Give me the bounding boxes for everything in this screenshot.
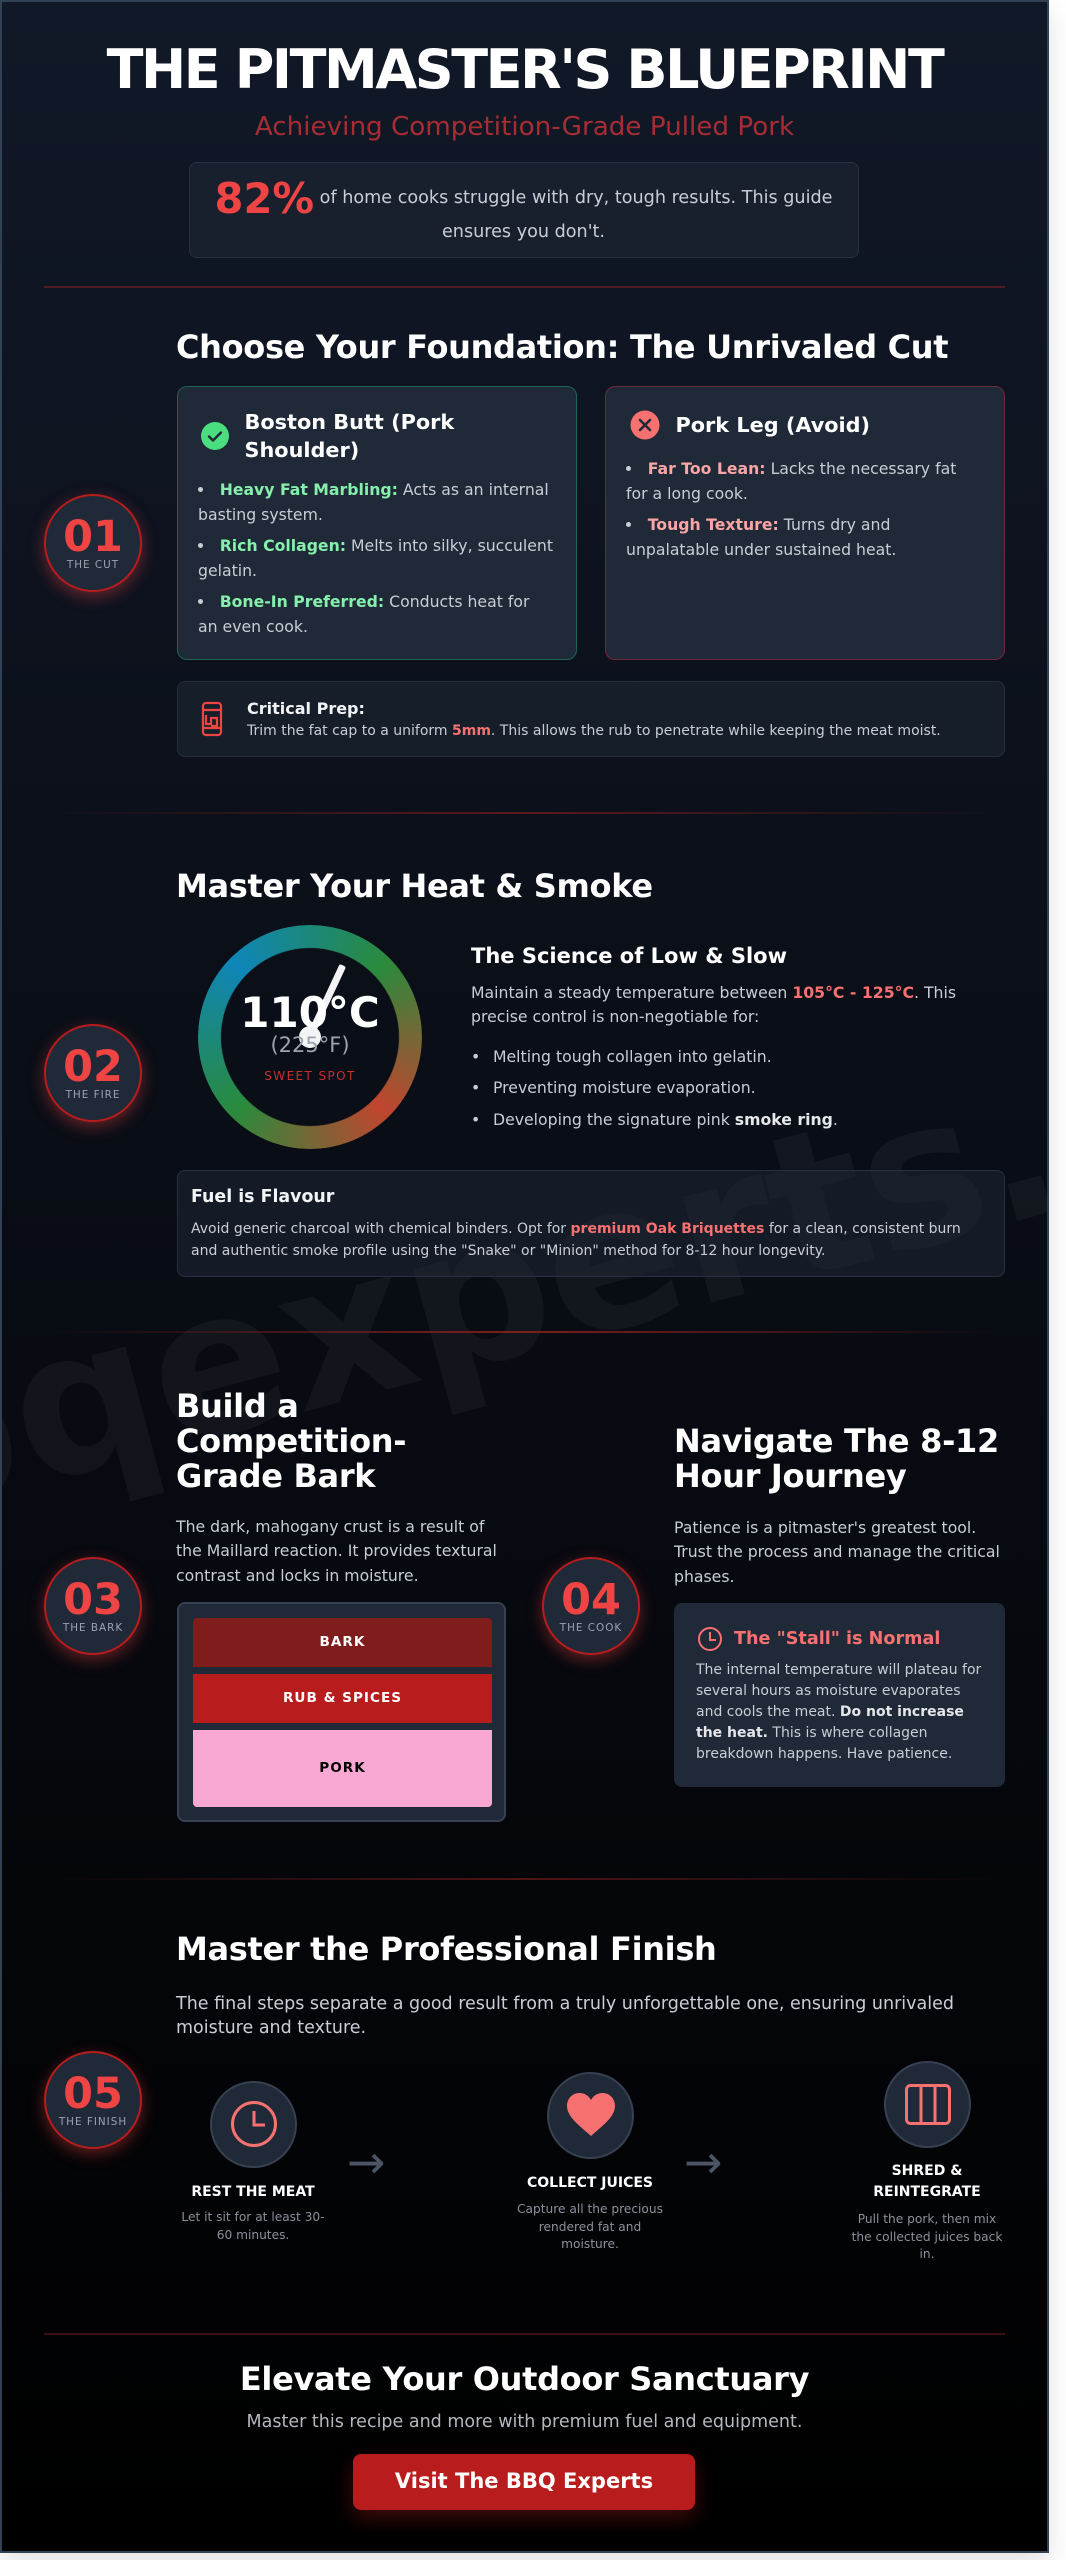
heading: bark: Competition- bbox=[176, 1422, 406, 1460]
layer: pork: PORK bbox=[319, 1760, 366, 1776]
process step: shred bbox=[852, 2061, 1002, 2261]
step text: 60 minutes. bbox=[217, 2228, 289, 2242]
prep title: Critical Prep: bbox=[247, 699, 365, 718]
science text: precise control is non-negotiable for: bbox=[471, 1007, 759, 1026]
heading: journey: Navigate The 8-12 bbox=[674, 1422, 999, 1460]
button: Visit The BBQ Experts bbox=[395, 2469, 653, 2493]
journey text: Trust the process and manage the critical bbox=[674, 1542, 1000, 1561]
footer divider bbox=[44, 2333, 1005, 2335]
layer: rub: RUB & SPICES bbox=[283, 1690, 402, 1706]
card: boston butt bbox=[177, 386, 577, 660]
section divider bbox=[44, 1331, 1005, 1333]
benefits list: basting system. bbox=[198, 504, 323, 524]
benefits list: Bone-In Preferred: Conducts heat for bbox=[220, 592, 529, 611]
stall text: several hours as moisture evaporates bbox=[696, 1683, 961, 1699]
step badge 05 bbox=[44, 2051, 142, 2149]
process step: rest bbox=[181, 2081, 325, 2242]
finish text bbox=[176, 1994, 954, 2038]
section divider bbox=[44, 1878, 1005, 1880]
stall text bbox=[696, 1662, 982, 1762]
stall text: and cools the meat. Do not increase bbox=[696, 1704, 964, 1720]
finish text: moisture and texture. bbox=[176, 2018, 366, 2038]
step badge 01: 01 bbox=[63, 512, 123, 562]
step text: Pull the pork, then mix bbox=[858, 2212, 996, 2226]
stall text: breakdown happens. Have patience. bbox=[696, 1746, 952, 1762]
journey text bbox=[674, 1518, 1000, 1586]
gauge needle bbox=[306, 964, 346, 1039]
heading: finish: Master the Professional Finish bbox=[176, 1930, 717, 1968]
icon: clock bbox=[698, 1627, 722, 1651]
icon: cross bbox=[630, 410, 660, 440]
bark text: contrast and locks in moisture. bbox=[176, 1566, 419, 1585]
layer: pork bbox=[193, 1730, 492, 1807]
step text: in. bbox=[920, 2247, 934, 2261]
stat text: ensures you don't. bbox=[442, 222, 605, 242]
heading: bark: Grade Bark bbox=[176, 1457, 375, 1495]
step badge 02: 02 bbox=[63, 1042, 123, 1092]
step text: Capture all the precious bbox=[517, 2202, 663, 2216]
step badge 02 bbox=[44, 1024, 142, 1122]
science list: Developing the signature pink smoke ring. bbox=[493, 1110, 838, 1129]
arrow: → bbox=[684, 2135, 723, 2189]
heading: heat: Master Your Heat & Smoke bbox=[176, 867, 653, 905]
arrow: → bbox=[347, 2135, 386, 2189]
footer text: Master this recipe and more with premium fuel and equipment. bbox=[247, 2412, 802, 2432]
step text: Let it sit for at least 30- bbox=[181, 2210, 325, 2224]
science text bbox=[471, 983, 956, 1026]
science text: Maintain a steady temperature between 105°C - 125°C. This bbox=[471, 983, 956, 1002]
fuel title: Fuel is Flavour bbox=[191, 1187, 334, 1207]
benefits list: an even cook. bbox=[198, 616, 308, 636]
science title: The Science of Low & Slow bbox=[471, 944, 787, 968]
drawbacks list: unpalatable under sustained heat. bbox=[626, 540, 896, 558]
fuel text bbox=[191, 1221, 961, 1258]
icon: clock bbox=[210, 2081, 297, 2168]
callout: critical prep bbox=[177, 681, 1005, 757]
layer: bark: BARK bbox=[320, 1634, 365, 1650]
step badge 04 bbox=[542, 1557, 640, 1655]
footer heading: Elevate Your Outdoor Sanctuary bbox=[240, 2360, 809, 2398]
step badge 03 bbox=[44, 1557, 142, 1655]
science list: Preventing moisture evaporation. bbox=[493, 1078, 756, 1097]
step title: SHRED & bbox=[892, 2163, 962, 2179]
step title: REINTEGRATE bbox=[873, 2184, 981, 2200]
step text: rendered fat and bbox=[539, 2220, 641, 2234]
step text bbox=[517, 2202, 663, 2251]
heading: foundation: Choose Your Foundation: The Unrivaled Cut bbox=[176, 328, 948, 366]
step text bbox=[852, 2212, 1002, 2261]
step text bbox=[181, 2210, 325, 2242]
step badge 01: THE CUT bbox=[67, 559, 119, 571]
step text: moisture. bbox=[561, 2237, 619, 2251]
divider bbox=[44, 286, 1005, 288]
step badge 01 bbox=[44, 494, 142, 592]
benefits list bbox=[198, 480, 553, 636]
section divider bbox=[44, 812, 1005, 814]
gauge hub bbox=[299, 1026, 321, 1048]
fuel text: and authentic smoke profile using the "Snake" or "Minion" method for 8-12 hour longevity. bbox=[191, 1242, 826, 1258]
drawbacks list: Tough Texture: Turns dry and bbox=[648, 515, 890, 534]
journey text: Patience is a pitmaster's greatest tool. bbox=[674, 1518, 976, 1537]
bark layers diagram bbox=[177, 1602, 506, 1822]
benefits list: Rich Collagen: Melts into silky, succulent bbox=[220, 536, 553, 555]
heading: bark bbox=[176, 1387, 406, 1495]
finish text: The final steps separate a good result from a truly unforgettable one, ensuring unrivaled bbox=[176, 1994, 954, 2014]
drawbacks list: for a long cook. bbox=[626, 484, 748, 502]
stall text: the heat. This is where collagen bbox=[696, 1725, 928, 1741]
icon: check bbox=[201, 422, 229, 450]
callout: fuel bbox=[177, 1170, 1005, 1277]
icon: columns bbox=[884, 2061, 971, 2148]
step badge 04: THE COOK bbox=[560, 1622, 622, 1634]
step title: REST THE MEAT bbox=[191, 2184, 315, 2200]
card title: Shoulder) bbox=[244, 438, 359, 462]
step badge 05: THE FINISH bbox=[59, 2116, 127, 2128]
bark text: The dark, mahogany crust is a result of bbox=[176, 1517, 484, 1536]
sweet spot label: SWEET SPOT bbox=[264, 1069, 356, 1083]
stat callout bbox=[189, 162, 859, 258]
bark text: the Maillard reaction. It provides textural bbox=[176, 1541, 497, 1560]
drawbacks list: Far Too Lean: Lacks the necessary fat bbox=[648, 459, 956, 478]
stall title: The "Stall" is Normal bbox=[734, 1629, 940, 1649]
card title bbox=[244, 410, 454, 462]
card title: Boston Butt (Pork bbox=[244, 410, 454, 434]
layer: bark bbox=[193, 1618, 492, 1667]
temperature fahrenheit: (225°F) bbox=[270, 1033, 350, 1057]
process step: juices bbox=[517, 2072, 663, 2251]
callout: stall bbox=[674, 1603, 1005, 1787]
benefits list: gelatin. bbox=[198, 560, 257, 580]
temperature celsius: 110°C bbox=[240, 988, 380, 1037]
journey text: phases. bbox=[674, 1567, 734, 1586]
science list bbox=[473, 1047, 838, 1129]
stall text: The internal temperature will plateau for bbox=[696, 1662, 981, 1678]
heading: journey: Hour Journey bbox=[674, 1457, 906, 1495]
icon: heart bbox=[547, 2072, 634, 2159]
step badge 03: 03 bbox=[63, 1575, 123, 1625]
gauge bbox=[198, 925, 422, 1149]
step badge 02: THE FIRE bbox=[66, 1089, 120, 1101]
prep text: Trim the fat cap to a uniform 5mm. This allows the rub to penetrate while keeping the meat moist. bbox=[247, 723, 941, 739]
step title bbox=[873, 2163, 981, 2200]
step badge 03: THE BARK bbox=[63, 1622, 123, 1634]
layer: rub bbox=[193, 1674, 492, 1723]
icon: prep bbox=[202, 702, 222, 736]
step title: COLLECT JUICES bbox=[527, 2175, 653, 2191]
fuel text: Avoid generic charcoal with chemical binders. Opt for premium Oak Briquettes for a clean, consistent burn bbox=[191, 1221, 961, 1237]
step text: the collected juices back bbox=[852, 2230, 1002, 2244]
subtitle: Achieving Competition-Grade Pulled Pork bbox=[255, 112, 794, 142]
title: THE PITMASTER'S BLUEPRINT bbox=[107, 38, 942, 101]
heading: bark: Build a bbox=[176, 1387, 299, 1425]
step badge 04: 04 bbox=[561, 1575, 621, 1625]
stat text: 82% of home cooks struggle with dry, tough results. This guide bbox=[215, 174, 832, 223]
gauge ring bbox=[198, 925, 422, 1149]
heading: journey bbox=[674, 1422, 999, 1495]
step badge 05: 05 bbox=[63, 2069, 123, 2119]
bark text bbox=[176, 1517, 497, 1585]
benefits list: Heavy Fat Marbling: Acts as an internal bbox=[220, 480, 549, 499]
card title: Pork Leg (Avoid) bbox=[676, 413, 870, 437]
card: pork leg bbox=[605, 386, 1005, 660]
drawbacks list bbox=[626, 459, 956, 558]
science list: Melting tough collagen into gelatin. bbox=[493, 1047, 772, 1066]
button bbox=[353, 2454, 695, 2510]
